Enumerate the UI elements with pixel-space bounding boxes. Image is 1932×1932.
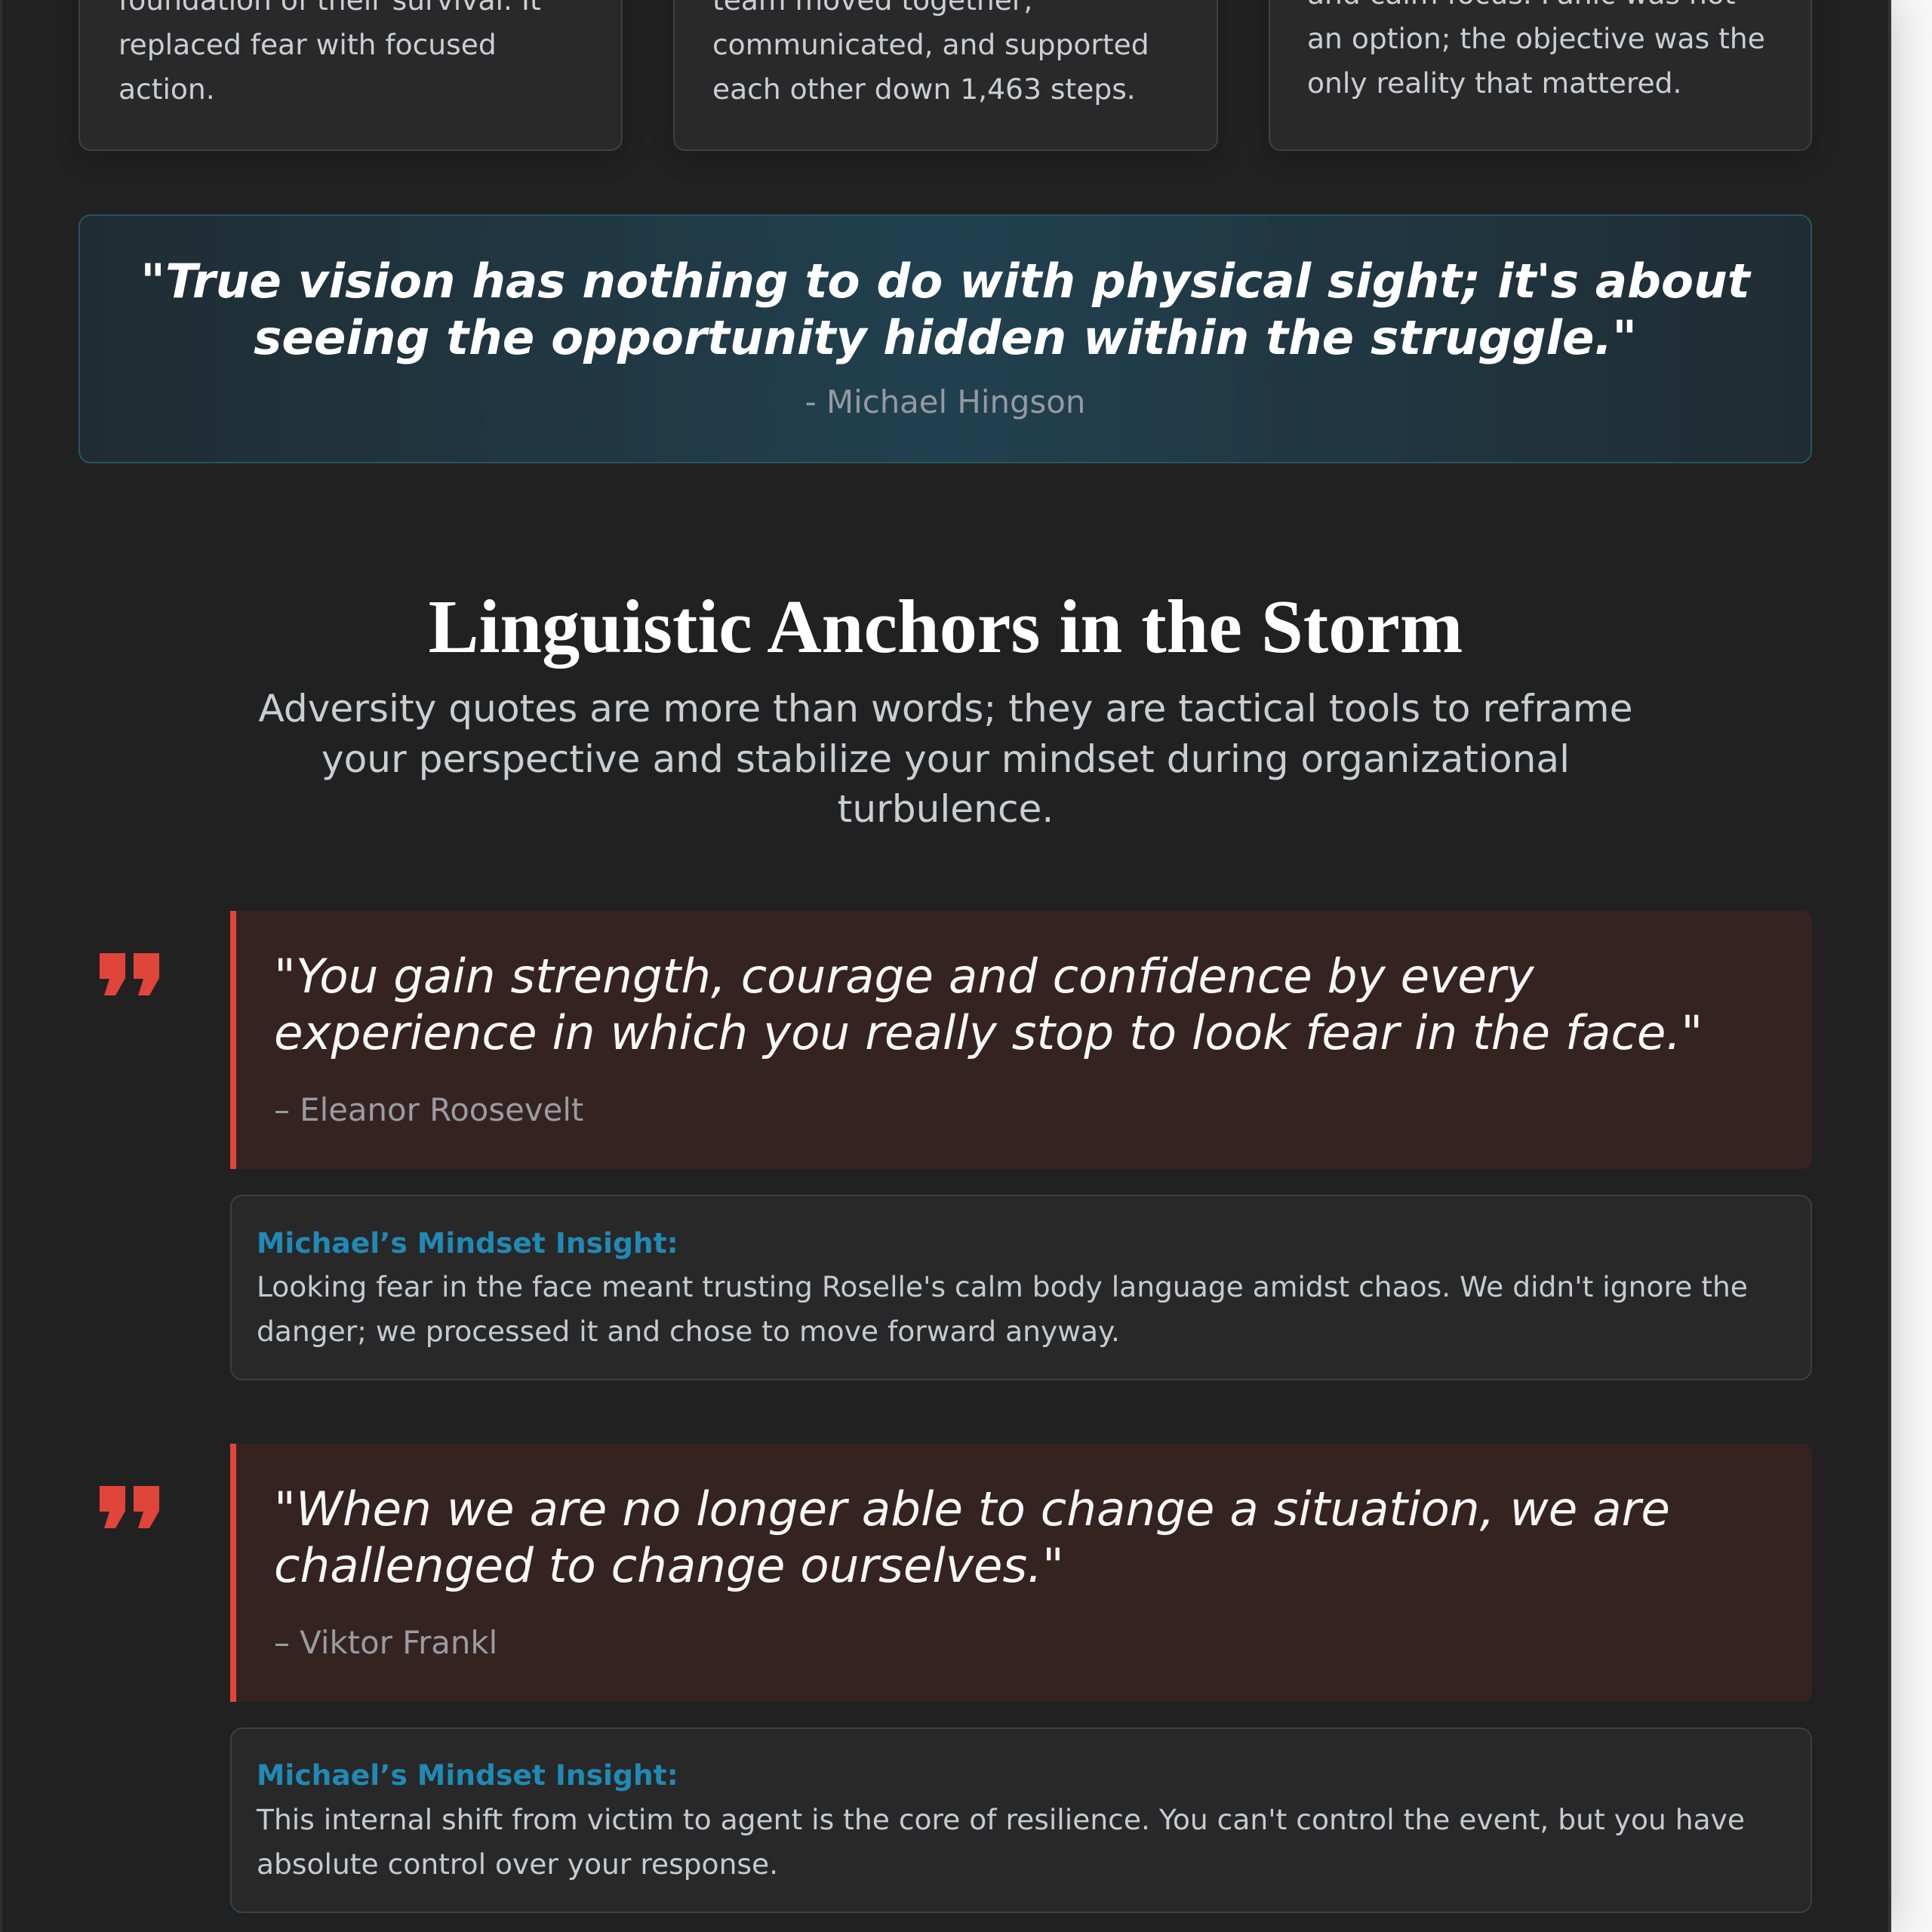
icon: quote mark 2 xyxy=(100,1486,159,1528)
banner quote text: "True vision has nothing to do with physical sight; it's about xyxy=(140,254,1750,309)
card text: middle: each other down 1,463 steps. xyxy=(712,72,1136,106)
insight body: This internal shift from victim to agent is the core of resilience. You can't control the event, but you have xyxy=(257,1803,1745,1836)
section subtitle xyxy=(258,686,1633,831)
banner: Michael Hingson quote xyxy=(78,214,1812,463)
insight box: second xyxy=(230,1727,1812,1913)
card text: middle: communicated, and supported xyxy=(712,28,1149,61)
insight body xyxy=(257,1270,1748,1348)
card text: left xyxy=(118,0,541,106)
insight box: first xyxy=(230,1195,1812,1380)
banner quote author: - Michael Hingson xyxy=(805,383,1085,420)
quote text xyxy=(274,949,1703,1060)
quote text: "When we are no longer able to change a situation, we are xyxy=(274,1481,1670,1537)
insight body: Looking fear in the face meant trusting Roselle's calm body language amidst chaos. We didn't ignore the xyxy=(257,1270,1748,1303)
icon: quote mark 1 xyxy=(100,953,159,995)
insight body: absolute control over your response. xyxy=(257,1847,778,1881)
card text: right xyxy=(1307,0,1765,100)
card text: middle xyxy=(712,0,1149,106)
quote text xyxy=(274,1481,1670,1593)
insight body xyxy=(257,1803,1745,1881)
insight heading: Michael’s Mindset Insight: xyxy=(257,1226,678,1260)
banner quote text: seeing the opportunity hidden within the struggle." xyxy=(254,310,1637,365)
quote text: challenged to change ourselves." xyxy=(274,1538,1064,1593)
card text: right: only reality that mattered. xyxy=(1307,66,1681,100)
card text: left: action. xyxy=(118,72,215,106)
card text: left: replaced fear with focused xyxy=(118,28,497,61)
card text: right: an option; the objective was the xyxy=(1307,22,1765,55)
section subtitle: turbulence. xyxy=(838,786,1054,831)
section title: Linguistic Anchors in the Storm xyxy=(429,585,1463,669)
insight body: danger; we processed it and chose to move forward anyway. xyxy=(257,1315,1120,1348)
card: right xyxy=(1269,0,1812,151)
quote block: Eleanor Roosevelt xyxy=(230,911,1812,1169)
insight heading: Michael’s Mindset Insight: xyxy=(257,1758,678,1792)
quote author: – Viktor Frankl xyxy=(274,1624,497,1661)
quote block: Viktor Frankl xyxy=(230,1444,1812,1702)
quote text: "You gain strength, courage and confidence by every xyxy=(274,949,1534,1004)
banner quote text xyxy=(140,254,1752,365)
section subtitle: Adversity quotes are more than words; they are tactical tools to reframe xyxy=(258,686,1633,731)
card: left xyxy=(78,0,623,151)
card: middle xyxy=(673,0,1218,151)
section subtitle: your perspective and stabilize your mindset during organizational xyxy=(321,737,1570,781)
quote text: experience in which you really stop to look fear in the face." xyxy=(274,1005,1703,1060)
quote author: – Eleanor Roosevelt xyxy=(274,1091,583,1128)
